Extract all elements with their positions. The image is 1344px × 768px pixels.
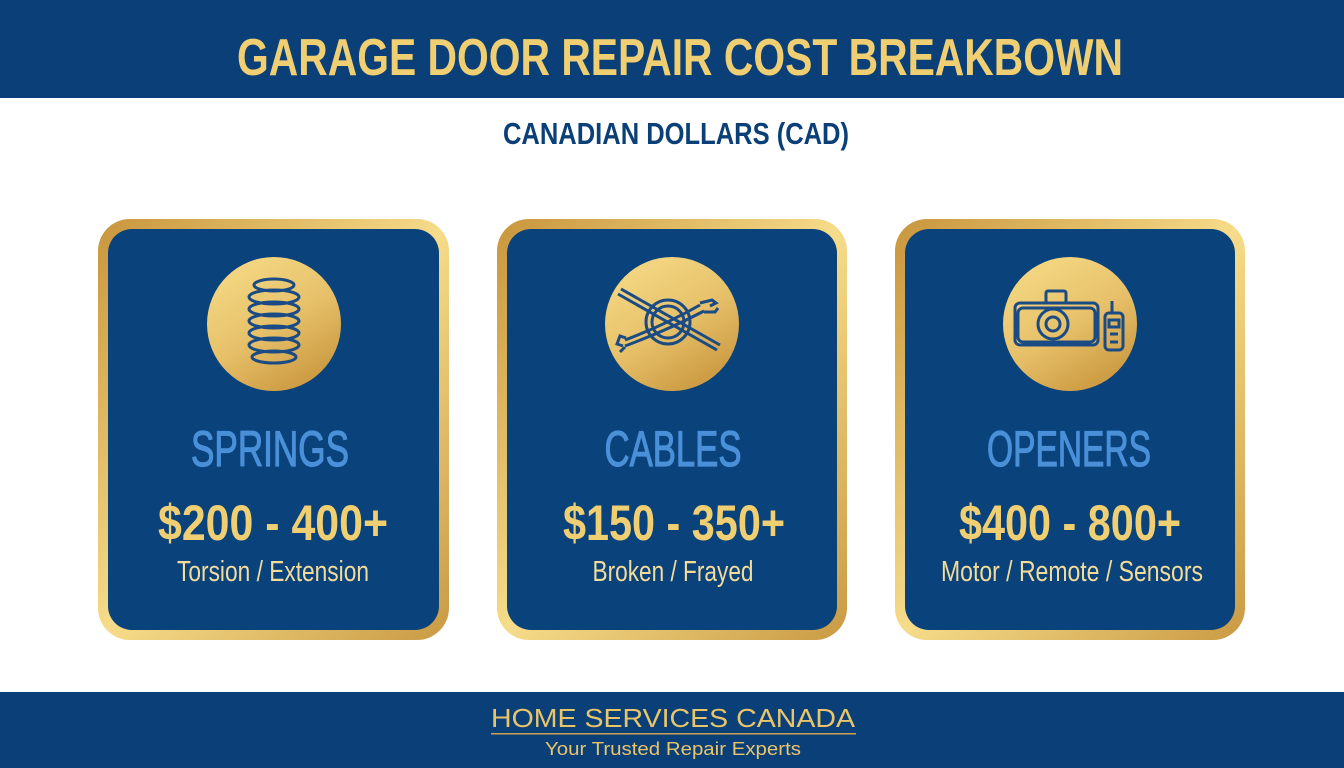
footer brand: HOME SERVICES CANADA [491,703,856,733]
title: GARAGE DOOR REPAIR COST BREAKBOWN [237,29,1123,87]
panel: openers [895,219,1245,640]
icon: opener [1003,257,1137,391]
icon: spring [207,257,341,391]
heading: springs: SPRINGS [191,421,349,477]
heading: cables: CABLES [604,421,742,477]
price: cables: $150 - 350+ [563,495,785,551]
description: springs: Torsion / Extension [177,556,369,588]
footer [0,692,1344,768]
panel: springs [98,219,449,640]
price: springs: $200 - 400+ [158,495,388,551]
description: cables: Broken / Frayed [592,556,754,588]
heading: openers: OPENERS [987,421,1151,477]
footer tagline: Your Trusted Repair Experts [545,739,801,759]
price: openers: $400 - 800+ [959,495,1181,551]
icon: cables [605,257,739,391]
panel: cables [497,219,847,640]
header band [0,0,1344,98]
description: openers: Motor / Remote / Sensors [941,556,1203,588]
subtitle: CANADIAN DOLLARS (CAD) [503,116,849,151]
